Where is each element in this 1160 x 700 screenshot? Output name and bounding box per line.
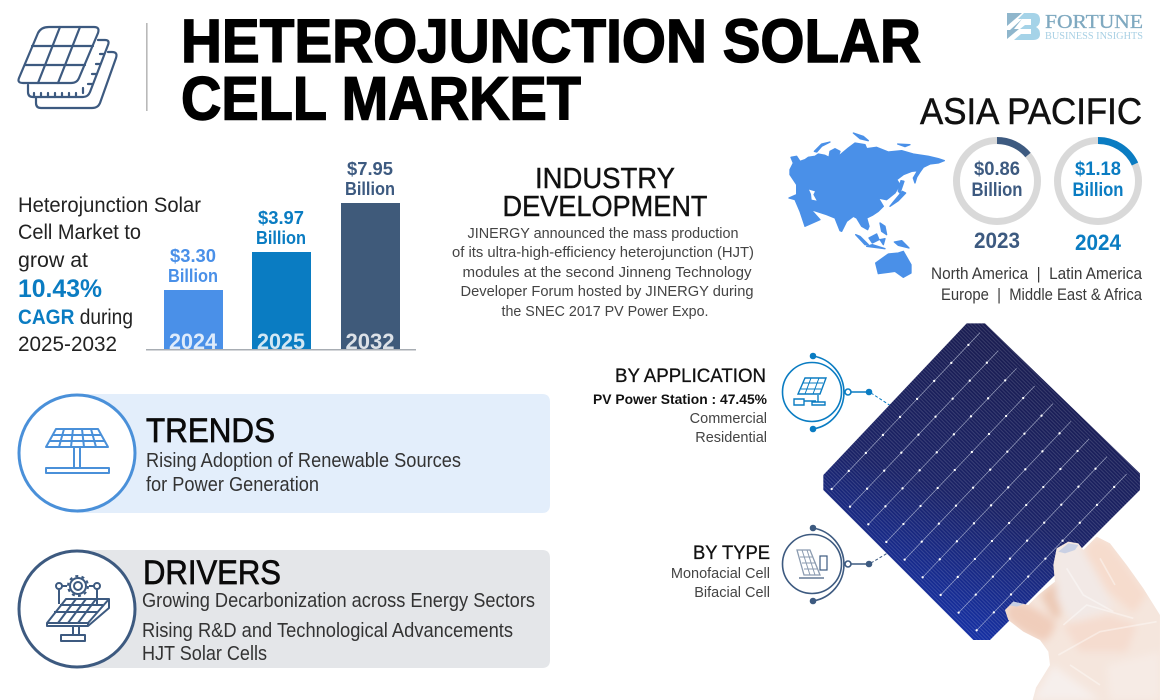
icon: application connector (782, 354, 891, 432)
heading: trends: TRENDS (146, 412, 275, 450)
logo: Fortune Business Insights (1007, 11, 1143, 42)
heading: Asia Pacific: ASIA PACIFIC (920, 91, 1142, 132)
bar chart: market size: Billion (168, 265, 218, 286)
panel: drivers (19, 550, 550, 668)
other regions list: North America | Latin America (931, 265, 1143, 283)
text: trends body: for Power Generation (146, 474, 319, 496)
logo: Fortune Business Insights: BUSINESS INSIGHTS (1045, 31, 1143, 42)
bar chart: market size: 2025 (257, 329, 305, 354)
hand in glove (1000, 525, 1160, 700)
donut: 2024 value: 2024 (1075, 230, 1122, 255)
text: industry development: of its ultra-high-efficiency heterojunction (HJT) (452, 245, 754, 261)
text: by application: Commercial (690, 411, 767, 427)
bar chart: market size: $7.95 (347, 158, 393, 179)
text: industry development: Developer Forum hosted by JINERGY during (460, 284, 754, 300)
divider line (146, 23, 148, 111)
text: by application: PV Power Station : 47.45% (593, 392, 767, 407)
donut: 2024 value: $1.18 (1075, 159, 1121, 180)
panel: trends (19, 394, 550, 513)
text: by type (671, 542, 770, 601)
donut: 2024 value (1058, 140, 1138, 255)
text: by type: Bifacial Cell (694, 585, 770, 601)
text: trends body: Rising Adoption of Renewable Sources (146, 450, 461, 472)
text: drivers body: Rising R&D and Technological Advancements (142, 620, 513, 642)
text: industry development: modules at the second Jinneng Technology (462, 265, 752, 281)
bar chart: market size (146, 158, 416, 354)
text: industry development: DEVELOPMENT (502, 191, 708, 223)
text: CAGR summary: Cell Market to (18, 221, 141, 244)
text: by type: BY TYPE (693, 542, 770, 564)
text: by application: Residential (695, 430, 767, 446)
text: industry development (452, 163, 754, 320)
text: CAGR summary: Heterojunction Solar (18, 194, 201, 217)
text: drivers body: HJT Solar Cells (142, 643, 267, 665)
heading: drivers: DRIVERS (143, 554, 281, 592)
title (181, 7, 921, 132)
bar chart: market size: Billion (256, 227, 306, 248)
icon: solar panel on stand (19, 395, 135, 511)
bar chart: market size: 2024 (169, 329, 218, 354)
text: trends body (146, 450, 461, 496)
other regions list: Europe | Middle East & Africa (941, 286, 1143, 304)
text: CAGR summary: grow at (18, 249, 88, 272)
text: CAGR summary: 2025-2032 (18, 333, 117, 356)
text: drivers body (142, 590, 535, 665)
logo: Fortune Business Insights: FORTUNE (1045, 11, 1143, 33)
map: Asia Pacific (789, 133, 944, 277)
donut: 2023 value: $0.86 (974, 159, 1020, 180)
donut: 2023 value: 2023 (974, 228, 1020, 253)
text: by application (593, 365, 767, 446)
text: industry development: the SNEC 2017 PV Power Expo. (502, 304, 708, 320)
other regions list (931, 265, 1143, 304)
text: CAGR summary: 10.43% (18, 275, 102, 303)
bar chart: market size: 2032 (346, 329, 394, 354)
title: HETEROJUNCTION SOLAR (181, 7, 921, 75)
bar chart: market size: $3.30 (170, 245, 216, 266)
text: CAGR summary (18, 194, 201, 356)
text: by type: Monofacial Cell (671, 566, 770, 582)
donut: 2024 value: Billion (1072, 180, 1124, 201)
icon: solar panel with gear (19, 551, 135, 667)
text: by application: BY APPLICATION (615, 365, 766, 387)
solar cell photo (823, 323, 1140, 640)
bar chart: market size: $3.97 (258, 207, 304, 228)
donut: 2023 value: Billion (972, 180, 1022, 201)
text: CAGR summary: CAGR during (18, 306, 133, 329)
icon: type connector (782, 526, 891, 604)
text: drivers body: Growing Decarbonization across Energy Sectors (142, 590, 535, 612)
icon: solar panel layers (18, 27, 116, 108)
title: CELL MARKET (181, 64, 581, 132)
text: industry development: JINERGY announced the mass production (468, 226, 738, 242)
donut: 2023 value (956, 140, 1038, 253)
bar chart: market size: Billion (345, 178, 395, 199)
text: industry development: INDUSTRY (535, 163, 675, 195)
